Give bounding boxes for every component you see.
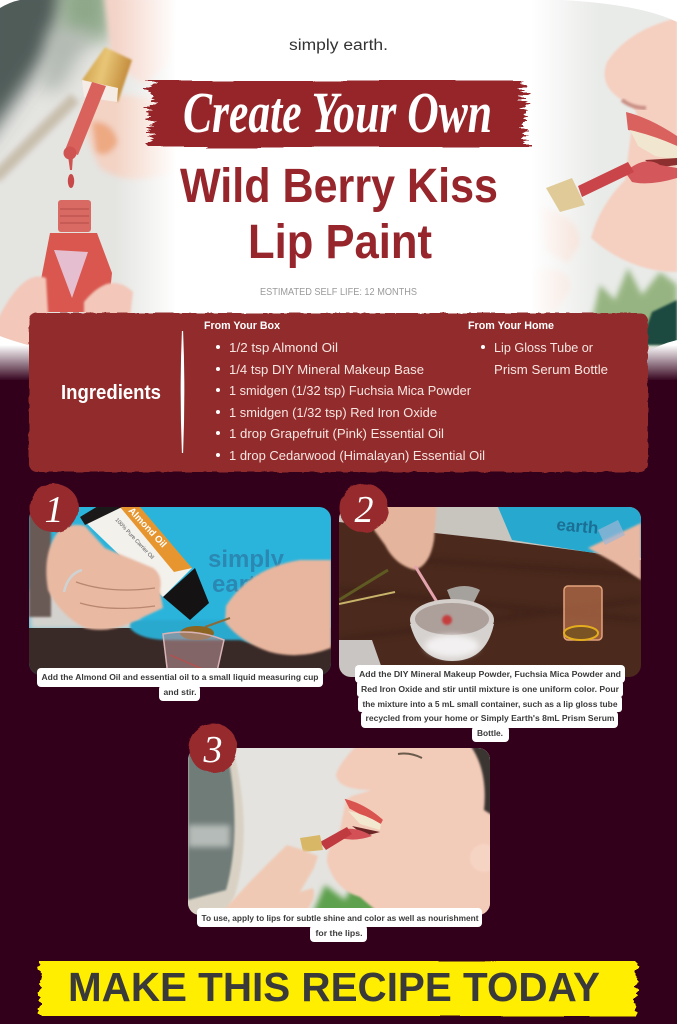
packet [339,640,385,677]
face [327,745,492,918]
step 1 photo: earth [212,571,271,598]
step 2 badge: 2 [354,489,374,531]
step 3 badge [188,724,238,772]
glass bowl [410,599,494,661]
step 1 caption [37,668,323,701]
list: from your box: 1/4 tsp DIY Mineral Makeup Base [229,363,424,377]
heading: brush banner Create Your Own: Create Your Own [183,80,492,145]
left hand [46,525,163,630]
list: from your box [204,320,485,463]
step 3 caption: To use, apply to lips for subtle shine and color as well as nourishment [202,914,479,923]
spoon and cup [162,617,230,668]
photo: lower left hand [0,277,133,346]
step 3 badge: 3 [202,729,222,771]
step 2 caption [355,665,625,742]
hand [226,844,318,908]
hero photo header [0,0,677,381]
shelf life note: ESTIMATED SELF LIFE: 12 MONTHS [260,286,417,298]
photo: left background [0,0,175,345]
step 2 caption: recycled from your home or Simply Earth's 8mL Prism Serum [366,714,614,723]
title: Wild Berry Kiss Lip Paint [180,160,498,269]
call to action banner: MAKE THIS RECIPE TODAY [68,964,600,1010]
photo: applicator [546,162,634,212]
beaker [564,586,602,640]
step 2 photo [339,500,641,677]
step 3 [188,724,498,942]
list: from your box: 1/2 tsp Almond Oil [229,341,338,355]
step 1 photo: simply [208,546,285,573]
funnel [447,586,480,602]
list: from your box: 1 drop Cedarwood (Himalayan) Essential Oil [229,449,485,463]
title: Wild Berry Kiss Lip Paint: Lip Paint [248,216,432,269]
list: from your box: 1 smidgen (1/32 tsp) Red Iron Oxide [229,406,437,420]
bottle: Almond Oil [126,506,168,550]
stirring stick [414,566,438,601]
lips and teeth [338,800,382,840]
logo: simply earth: simply earth. [289,37,388,54]
photo: dropper [64,47,132,188]
applicator [320,827,352,850]
bottle [80,500,209,620]
step 1 photo [29,500,331,676]
step 2 caption: Red Iron Oxide and stir until mixture is one uniform color. Pour [361,685,619,694]
step 2 photo: earth [556,515,599,538]
fade into dark background [0,345,677,381]
step 3 caption [197,908,482,942]
step 2 caption: Bottle. [477,729,503,738]
step 1 caption: Add the Almond Oil and essential oil to a small liquid measuring cup [42,673,319,682]
step 2 [339,484,641,742]
list: from your home: Lip Gloss Tube or [494,341,593,355]
step 3 caption: for the lips. [316,929,362,938]
step 1 caption: and stir. [164,688,196,697]
step 3 photo [188,745,498,918]
centre white area [177,0,530,312]
left fade to white [124,0,176,314]
bottle: 100% Pure Carrier Oil [114,517,155,561]
step 1 [29,484,331,701]
photo: right hand fingers [551,215,580,304]
title: Wild Berry Kiss Lip Paint: Wild Berry Kiss [180,160,498,213]
divider [181,331,184,453]
list: from your box: 1 smidgen (1/32 tsp) Fuchsia Mica Powder [229,384,471,398]
step 2 badge [340,484,388,532]
step 2 caption: the mixture into a 5 mL small container, such as a lip gloss tube [362,700,618,709]
ingredients heading: Ingredients [61,382,161,404]
right fade to white [532,0,581,314]
step 1 badge [30,484,78,532]
photo: left hand holding dropper [84,0,160,180]
list: from your home [468,320,608,377]
list: from your box: From Your Box [204,320,281,332]
list: from your box: 1 drop Grapefruit (Pink) Essential Oil [229,427,444,441]
step 2 caption: Add the DIY Mineral Makeup Powder, Fuchsia Mica Powder and [359,670,621,679]
right hand [225,560,331,655]
panel: ingredients [29,313,648,472]
list: from your home: From Your Home [468,320,554,332]
step 1 badge: 1 [44,489,64,531]
photo: nail paint bottle [39,200,112,312]
photo: face [591,18,677,272]
list: from your home: Prism Serum Bottle [494,363,608,377]
photo: right background [554,0,677,349]
